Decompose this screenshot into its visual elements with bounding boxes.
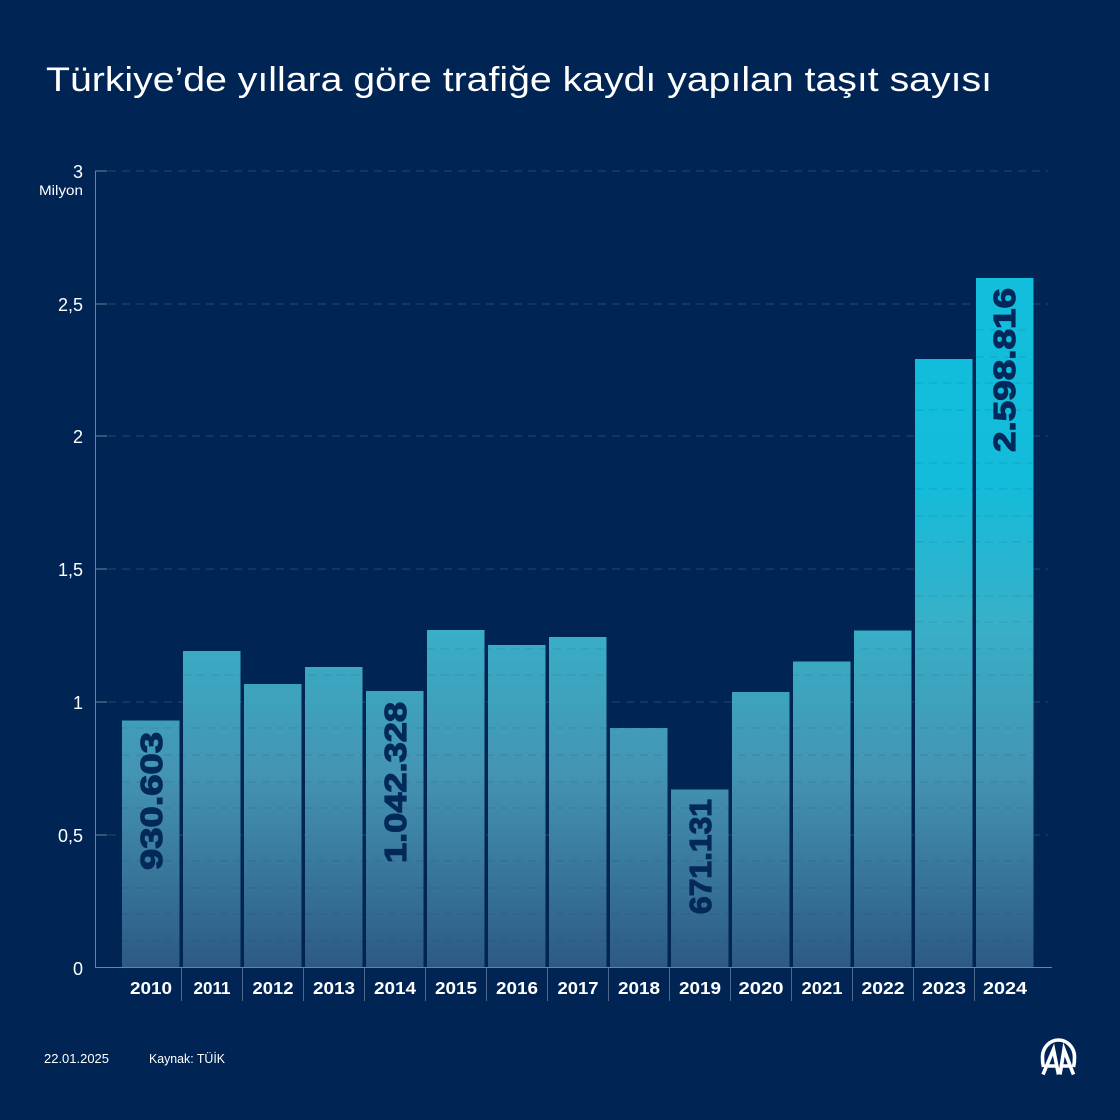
y axis labels: 2,5 xyxy=(58,295,83,315)
bar value labels: 2.598.816 xyxy=(987,288,1022,452)
x axis labels: 2011 xyxy=(194,978,231,998)
x axis xyxy=(95,968,1052,1001)
x axis labels: 2021 xyxy=(802,978,843,998)
y axis labels: 0 xyxy=(73,959,83,979)
x axis labels: 2014 xyxy=(374,978,416,998)
x axis labels: 2024 xyxy=(983,978,1027,998)
x axis labels: 2023 xyxy=(922,978,966,998)
y axis xyxy=(58,162,107,979)
bar inner dashed lines xyxy=(122,330,1033,941)
y axis labels: 2 xyxy=(73,427,83,447)
title: Türkiye’de yıllara göre trafiğe kaydı yapılan taşıt sayısı xyxy=(46,61,992,99)
x axis labels: 2013 xyxy=(313,978,355,998)
bar chart xyxy=(122,278,1034,967)
x axis labels: 2017 xyxy=(558,978,598,998)
date: 22.01.2025 xyxy=(44,1052,109,1066)
y axis labels: 1,5 xyxy=(58,560,83,580)
gridlines xyxy=(108,171,1048,835)
x axis labels: 2019 xyxy=(679,978,721,998)
source: Kaynak: TÜİK xyxy=(149,1052,226,1066)
x axis labels: 2015 xyxy=(435,978,477,998)
y axis labels xyxy=(58,162,83,979)
y axis labels: 1 xyxy=(73,693,83,713)
icon: AA logo xyxy=(1042,1040,1075,1074)
x axis labels: 2012 xyxy=(252,978,294,998)
y axis labels: 3 xyxy=(73,162,83,182)
x axis labels xyxy=(130,978,1027,998)
bar value labels: 671.131 xyxy=(683,799,718,914)
unit label: Milyon xyxy=(39,182,83,198)
y axis labels: 0,5 xyxy=(58,826,83,846)
bar value labels: 930.603 xyxy=(134,732,169,870)
x axis labels: 2018 xyxy=(618,978,660,998)
x axis labels: 2022 xyxy=(862,978,905,998)
x axis labels: 2010 xyxy=(130,978,172,998)
bar value labels: 1.042.328 xyxy=(378,702,413,863)
x axis labels: 2020 xyxy=(738,978,784,998)
x axis labels: 2016 xyxy=(496,978,538,998)
bar value labels xyxy=(134,288,1022,914)
